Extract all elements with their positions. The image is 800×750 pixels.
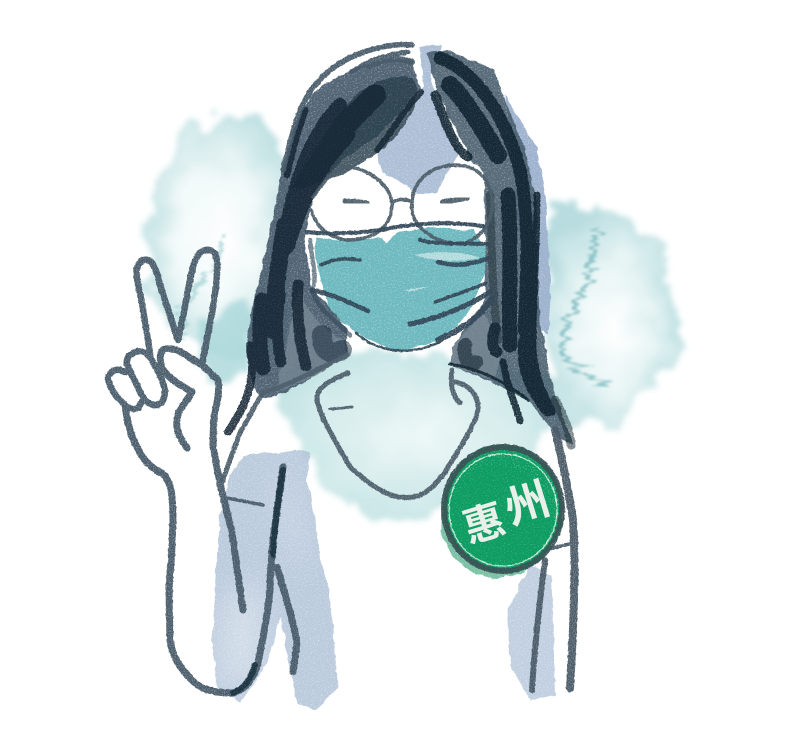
right hair	[427, 50, 573, 445]
neck and collar outline	[223, 355, 478, 498]
dark overlap on sleeve line	[233, 470, 283, 693]
badge: Huizhou: 州	[496, 463, 557, 537]
blue wash: forehead	[377, 44, 460, 193]
badge: Huizhou	[441, 445, 563, 578]
feathered tide line right	[564, 228, 610, 388]
eyes	[345, 198, 467, 203]
fingers: peace sign	[136, 250, 217, 365]
blue wash: beside right hair	[505, 95, 551, 335]
face mask	[315, 228, 485, 352]
left hair	[228, 45, 421, 432]
darker wash pool near hand	[195, 304, 258, 387]
blue wash: right shoulder	[507, 565, 555, 700]
curled finger one	[127, 351, 165, 405]
hand and arm outline	[108, 250, 297, 693]
light patch on sleeve	[220, 460, 305, 695]
background teal watercolor wash	[143, 114, 683, 515]
thumb and palm edge	[160, 349, 243, 610]
curled finger two	[108, 370, 143, 409]
mask highlights	[405, 252, 480, 292]
right long lines	[532, 430, 577, 690]
feathered tide line left	[181, 240, 222, 340]
forearm	[125, 405, 283, 693]
glasses	[311, 165, 492, 243]
blue wash: sleeve	[212, 450, 338, 710]
badge text: 惠	[455, 485, 511, 555]
mask straps and folds	[307, 223, 492, 351]
